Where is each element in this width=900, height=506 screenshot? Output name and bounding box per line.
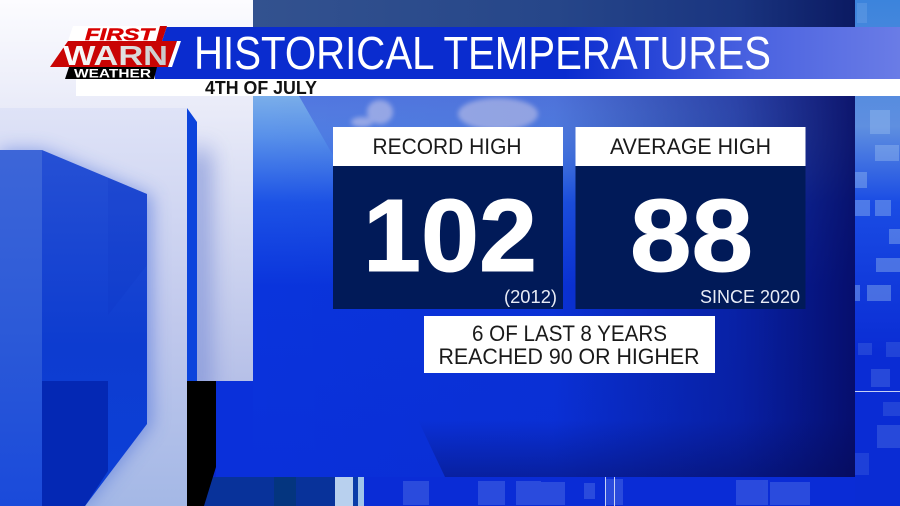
left panel: blue 3D block — [0, 150, 147, 506]
background: bottom tile strip — [204, 477, 855, 506]
logo: First Warn Weather — [50, 25, 181, 80]
logo: First Warn Weather: FIRST — [85, 25, 156, 44]
average high label — [576, 127, 806, 166]
record high label: RECORD HIGH — [372, 134, 522, 159]
record high label — [333, 127, 563, 166]
record high value: 102 — [363, 178, 537, 293]
title bar — [155, 27, 900, 79]
left panel: black base — [187, 381, 216, 506]
left panel: blue side strip — [187, 108, 197, 381]
average high value: 88 — [630, 178, 753, 293]
subtitle: 4TH OF JULY — [205, 78, 317, 98]
panel: average high — [576, 127, 806, 309]
logo: First Warn Weather: WEATHER — [74, 68, 152, 80]
callout: years reaching 90 — [424, 316, 715, 373]
subtitle strip — [76, 79, 900, 96]
left panel: inner pale frame — [0, 108, 187, 506]
background: blue sky field — [216, 0, 855, 477]
callout: years reaching 90: 6 OF LAST 8 YEARS — [472, 321, 667, 346]
title: HISTORICAL TEMPERATURES — [194, 27, 771, 79]
logo: First Warn Weather: WARN — [63, 40, 168, 71]
average high label: AVERAGE HIGH — [610, 134, 771, 159]
left panel: outer pale frame — [0, 0, 253, 400]
callout: years reaching 90: REACHED 90 OR HIGHER — [438, 344, 700, 369]
average high period: SINCE 2020 — [700, 287, 800, 307]
panel: record high — [333, 127, 563, 309]
record high year: (2012) — [504, 287, 557, 307]
background: right tile strip — [855, 0, 900, 506]
